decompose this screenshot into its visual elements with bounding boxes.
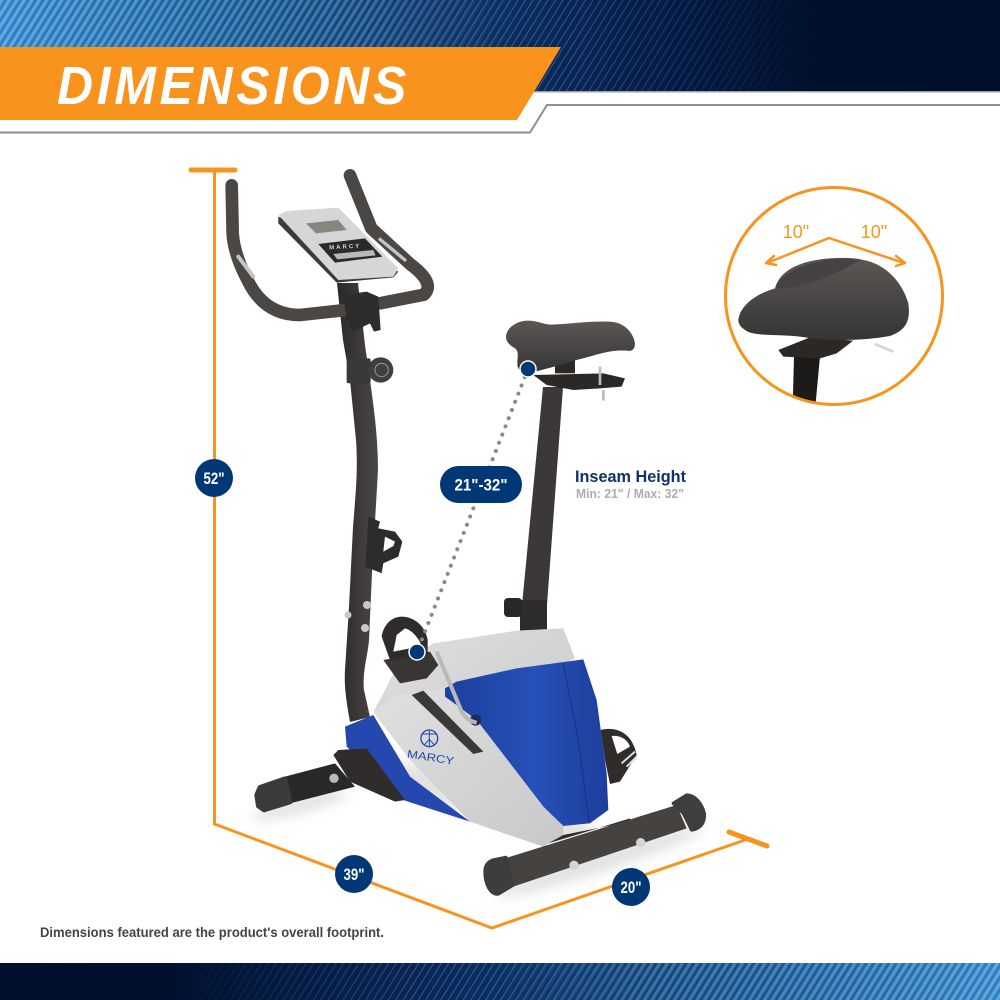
saddle cushion	[506, 321, 635, 373]
header band	[0, 0, 1000, 92]
seat width right label: 10"	[861, 222, 887, 242]
vent grille	[412, 691, 483, 754]
saddle bracket	[533, 360, 625, 401]
marcy logo: MARCY	[406, 748, 456, 768]
left pedal	[382, 617, 438, 683]
title banner	[0, 47, 561, 120]
seat detail inset	[726, 188, 942, 407]
blue shell	[445, 659, 608, 826]
rear pedal	[601, 729, 637, 784]
badge: length 39 inches	[335, 855, 373, 893]
inset ring	[726, 188, 942, 404]
inset saddle	[738, 258, 909, 407]
handlebar	[232, 175, 428, 315]
bottle holder	[365, 517, 402, 573]
silver body	[373, 688, 563, 847]
crank arm	[437, 652, 481, 726]
inseam dotted line	[417, 369, 528, 652]
handlebar clamp and resistance knob	[343, 292, 393, 383]
main upright post	[337, 283, 378, 722]
flywheel housing	[333, 617, 637, 847]
badge: width 20 inches	[612, 868, 650, 906]
badge: length 39 inches: 39"	[344, 866, 364, 884]
inseam marker: pedal	[409, 644, 425, 660]
dark foot cover	[333, 748, 405, 802]
post bolts	[344, 601, 371, 632]
badge: inseam range	[440, 466, 522, 503]
marcy logo	[406, 730, 456, 768]
seat post	[520, 387, 563, 632]
saddle	[506, 321, 635, 401]
title: DIMENSIONS	[57, 56, 410, 116]
grey header rule	[0, 105, 1000, 132]
badge: height 52 inches: 52"	[204, 470, 224, 488]
inseam marker: seat	[520, 361, 536, 377]
lower blue panel	[345, 715, 470, 822]
footnote: Dimensions featured are the product's overall footprint.	[40, 925, 384, 940]
console	[278, 208, 398, 283]
badge: inseam range: 21"-32"	[454, 476, 508, 494]
rear stabilizer	[485, 795, 704, 894]
seat width left label: 10"	[783, 222, 809, 242]
console: MARCY	[329, 244, 359, 251]
inseam height text: Min: 21" / Max: 32"	[576, 487, 684, 501]
badge: width 20 inches: 20"	[620, 879, 642, 897]
seat post knob	[504, 598, 522, 617]
seat width arrows	[766, 238, 905, 266]
housing top cover	[373, 628, 575, 760]
footer band	[0, 963, 1000, 1000]
badge: height 52 inches	[195, 459, 233, 497]
dimension lines	[191, 170, 767, 928]
floor shadows	[250, 745, 708, 906]
inseam height text	[575, 468, 686, 501]
inseam height text: Inseam Height	[575, 468, 686, 486]
exercise bike	[232, 175, 704, 894]
front stabilizer	[257, 763, 355, 810]
